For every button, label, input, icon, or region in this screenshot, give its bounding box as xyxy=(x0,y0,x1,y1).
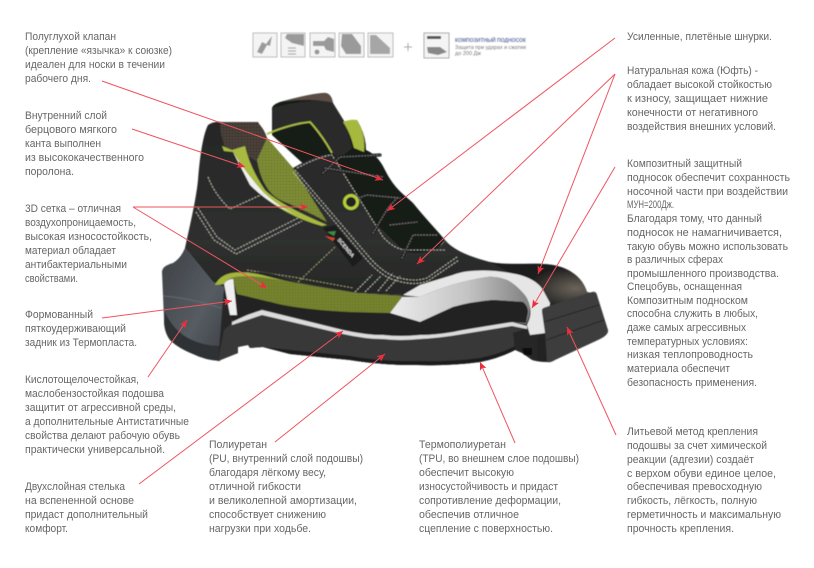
text: composite toecap: носочной части при воздействии xyxy=(627,186,788,198)
toe bumper xyxy=(537,292,608,362)
text: polyurethane: нагрузки при ходьбе. xyxy=(209,523,311,535)
text: injection moulding: реакции (адгезии) создаёт xyxy=(627,454,754,466)
text: inner collar layer: поролона. xyxy=(25,166,74,178)
text: tongue flap: (крепление «язычка» к союзке) xyxy=(25,45,172,57)
icon: boot toe xyxy=(368,33,393,57)
composite toecap caption: Защита при ударах и сжатии xyxy=(455,45,526,51)
green insole xyxy=(215,272,403,313)
icon: composite toecap xyxy=(424,33,449,58)
text: thermopolyurethane: сцепление с поверхностью. xyxy=(419,523,553,535)
text: natural leather: конечности от негативного xyxy=(627,107,758,119)
text: composite toecap: промышленного производства. xyxy=(627,268,779,280)
text: natural leather: обладает высокой стойкостью xyxy=(627,79,772,91)
text: composite toecap: подносок обеспечит сохранность xyxy=(627,172,790,184)
toe cap xyxy=(490,262,597,310)
text: heel counter: задник из Термопласта. xyxy=(25,337,137,349)
toe section xyxy=(403,270,550,335)
text: thermopolyurethane: (TPU, во внешнем слое подошвы) xyxy=(419,453,579,465)
text: polyurethane: и великолепной амортизации, xyxy=(209,495,357,507)
laces xyxy=(323,155,437,258)
text: injection moulding: прочность крепления. xyxy=(627,523,734,535)
text: polyurethane: способствует снижению xyxy=(209,509,326,521)
heel counter xyxy=(162,248,224,361)
text: thermopolyurethane: обеспечив отличное xyxy=(419,509,519,521)
text: 3D mesh: воздухопроницаемость, xyxy=(25,217,136,229)
text: 3D mesh: высокая износостойкость, xyxy=(25,231,152,243)
text: composite toecap: в различных сферах xyxy=(627,254,723,266)
text: inner collar layer: из высококачественного xyxy=(25,152,144,164)
plus sign xyxy=(404,43,412,51)
text: polyurethane xyxy=(209,439,363,535)
stitching xyxy=(196,155,459,292)
leather upper xyxy=(185,122,597,308)
text: polyurethane: Полиуретан xyxy=(209,439,267,451)
composite toecap caption: до 200 Дж xyxy=(455,51,482,57)
text: polyurethane: благодаря лёгкому весу, xyxy=(209,467,326,479)
text: composite toecap: Композитным подноском xyxy=(627,295,748,307)
text: laces: Усиленные, плетёные шнурки. xyxy=(627,31,772,43)
text: composite toecap xyxy=(627,158,790,389)
text: thermopolyurethane: сопротивление деформации, xyxy=(419,495,561,507)
text: composite toecap: подносок не намагничивается, xyxy=(627,227,782,239)
text: natural leather: воздействия внешних условий. xyxy=(627,121,776,133)
text: natural leather: Натуральная кожа (Юфть) - xyxy=(627,65,758,77)
text: inner collar layer: канта выполнен xyxy=(25,138,101,150)
text: insole: на вспененной основе xyxy=(25,495,134,507)
tongue and lace area xyxy=(267,93,445,270)
text: 3D mesh: материал обладает xyxy=(25,245,116,257)
text: 3D mesh xyxy=(25,203,152,285)
text: 3D mesh: свойствами. xyxy=(25,273,78,285)
text: composite toecap: МУН=200Дж. xyxy=(627,199,674,211)
text: 3D mesh: 3D сетка – отличная xyxy=(25,203,121,215)
icon: boot heel xyxy=(339,33,364,57)
text: tongue flap: идеален для носки в течении xyxy=(25,59,165,71)
text: composite toecap: температурных условиях: xyxy=(627,336,748,348)
text: insole xyxy=(25,481,148,535)
certification icons xyxy=(253,33,527,58)
text: outsole: Кислотощелочестойкая, xyxy=(25,374,139,386)
text: 3D mesh: антибактериальными xyxy=(25,259,127,271)
heel cup xyxy=(224,276,237,315)
text: outsole: а дополнительные Антистатичные xyxy=(25,416,189,428)
text: insole: придаст дополнительный xyxy=(25,509,148,521)
text: injection moulding: обеспечивая превосходную xyxy=(627,481,762,493)
text: injection moulding: с верхом обуви единое целое, xyxy=(627,468,776,480)
text: composite toecap: материала обеспечит xyxy=(627,363,730,375)
brand label: SCENDA xyxy=(335,237,355,259)
text: tongue flap: Полуглухой клапан xyxy=(25,31,116,43)
text: natural leather xyxy=(627,65,776,133)
text: outsole: практически универсальной. xyxy=(25,444,165,456)
composite toecap caption: КОМПОЗИТНЫЙ ПОДНОСОК xyxy=(455,36,527,44)
text: injection moulding: подошвы за счет химической xyxy=(627,440,767,452)
composite toecap caption xyxy=(455,36,527,57)
text: insole: комфорт. xyxy=(25,523,68,535)
text: thermopolyurethane: износустойчивость и придаст xyxy=(419,481,558,493)
text: outsole: защитит от агрессивной среды, xyxy=(25,402,176,414)
text: composite toecap: способна служить в любых, xyxy=(627,308,758,320)
text: composite toecap: Композитный защитный xyxy=(627,158,742,170)
icon: water tap xyxy=(310,33,335,57)
text: injection moulding: гибкость, лёгкость, полную xyxy=(627,495,757,507)
text: polyurethane: отличной гибкости xyxy=(209,481,301,493)
text: outsole xyxy=(25,374,189,456)
text: polyurethane: (PU, внутренний слой подошвы) xyxy=(209,453,363,465)
eyelet xyxy=(344,196,358,208)
text: composite toecap: низкая теплопроводность xyxy=(627,349,753,361)
text: composite toecap: безопасность применения. xyxy=(627,377,757,389)
icon: sole resistance xyxy=(281,33,305,57)
pointer arrows xyxy=(102,38,616,484)
text: injection moulding xyxy=(627,426,781,535)
boot illustration xyxy=(162,93,608,365)
text: composite toecap: Благодаря тому, что данный xyxy=(627,213,762,225)
text: insole: Двухслойная стелька xyxy=(25,481,126,493)
text: natural leather: к износу, защищает нижние xyxy=(627,93,768,105)
text: outsole: свойства делают рабочую обувь xyxy=(25,430,180,442)
text: thermopolyurethane: Термополиуретан xyxy=(419,439,506,451)
text: thermopolyurethane: обеспечит высокую xyxy=(419,467,514,479)
text: tongue flap xyxy=(25,31,172,85)
text: inner collar layer: Внутренний слой xyxy=(25,110,107,122)
text: composite toecap: такую обувь можно использовать xyxy=(627,241,788,253)
collar lining xyxy=(220,122,327,226)
icon: antistatic xyxy=(253,33,277,57)
text: tongue flap: рабочего дня. xyxy=(25,73,91,85)
text: outsole: маслобензостойкая подошва xyxy=(25,388,165,400)
text: injection moulding: герметичность и максимальную xyxy=(627,509,781,521)
text: composite toecap: Спецобувь, оснащенная xyxy=(627,281,742,293)
text: heel counter: Формованный xyxy=(25,309,93,321)
text: heel counter: пяткоудерживающий xyxy=(25,323,126,335)
brand label xyxy=(323,225,363,267)
text: composite toecap: даже самых агрессивных xyxy=(627,322,746,334)
text: inner collar layer xyxy=(25,110,144,178)
text: injection moulding: Литьевой метод крепления xyxy=(627,426,758,438)
text: heel counter xyxy=(25,309,137,349)
text: inner collar layer: берцового мягкого xyxy=(25,124,117,136)
sole cross-section xyxy=(215,270,550,365)
text: thermopolyurethane xyxy=(419,439,579,535)
